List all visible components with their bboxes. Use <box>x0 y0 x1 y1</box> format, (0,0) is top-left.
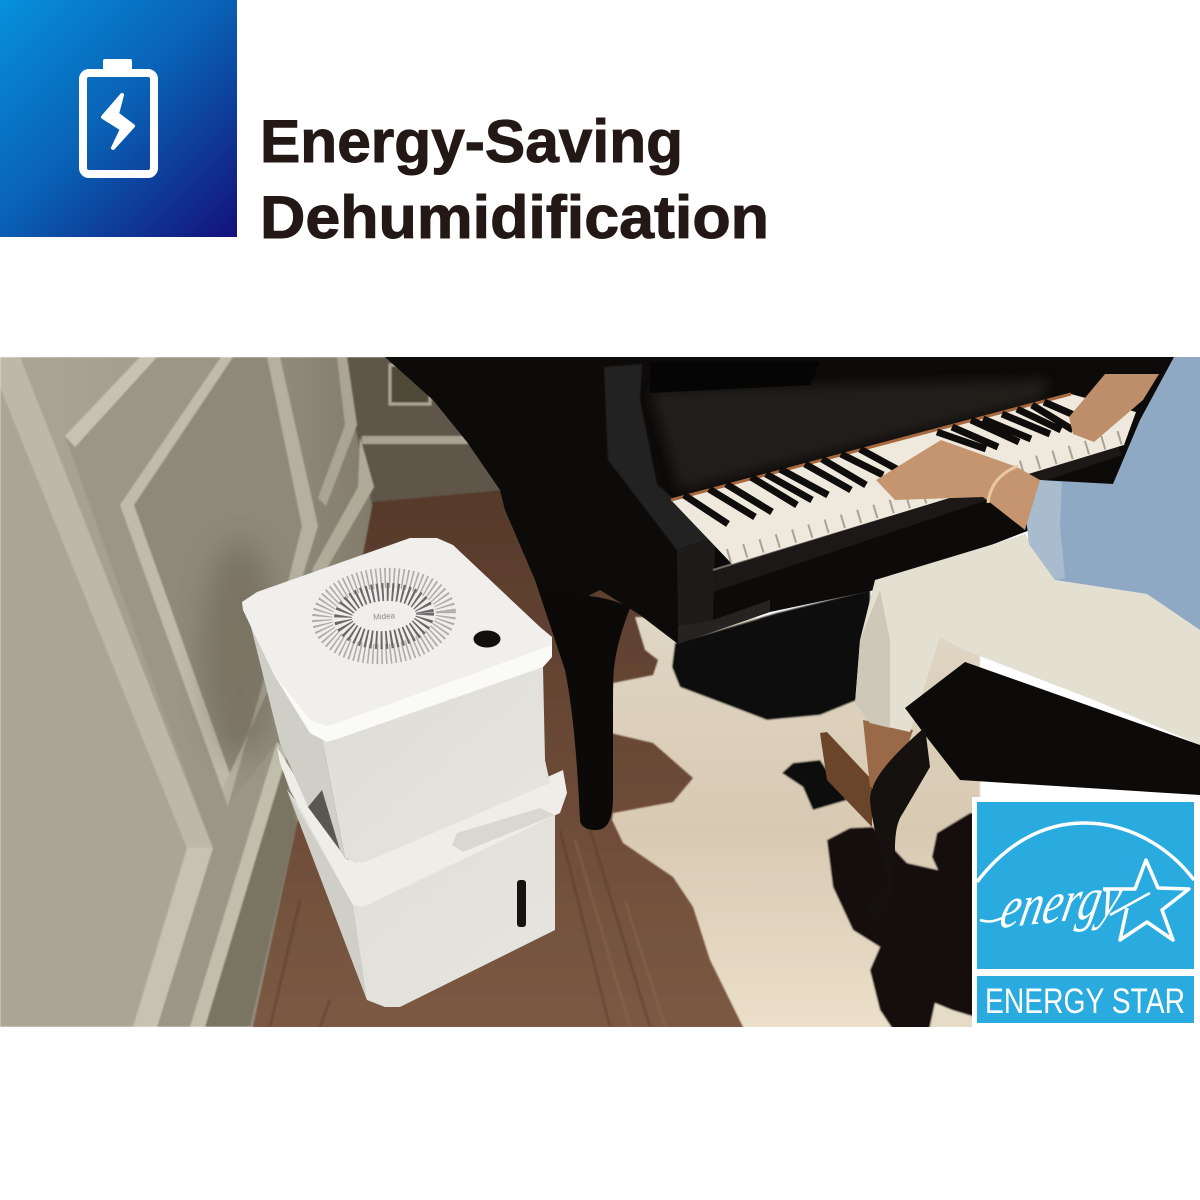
piano keys <box>671 394 1136 564</box>
tank handle <box>452 808 555 852</box>
piano body <box>385 357 1200 644</box>
pianist <box>820 357 1200 827</box>
shirt <box>1025 357 1200 630</box>
bench <box>865 662 1200 917</box>
polished cheek <box>604 364 715 550</box>
wall panelling <box>0 357 520 1027</box>
brand: Midea <box>373 611 396 622</box>
logotype: energy: energy <box>995 862 1129 941</box>
bracelet <box>988 466 1018 503</box>
patch: dark spot under piano <box>672 590 870 720</box>
title: Energy-Saving <box>260 108 683 175</box>
lid <box>242 538 552 742</box>
piano leg <box>535 580 630 830</box>
patch: small spot <box>782 760 847 810</box>
keyblock end <box>677 537 715 626</box>
patch: large spot <box>827 813 980 1040</box>
lower tank <box>287 790 555 1007</box>
fallboard strip <box>713 445 1122 592</box>
cowhide rug <box>610 590 980 1040</box>
icon: arc and star <box>977 823 1194 940</box>
fan grille <box>320 574 448 658</box>
title <box>260 108 769 251</box>
lower leg and shoe <box>820 732 872 827</box>
wood floor <box>250 490 800 1040</box>
wall shadow behind unit <box>202 540 278 760</box>
lid reflections <box>650 380 1050 490</box>
second hand <box>1069 374 1159 442</box>
title: Dehumidification <box>260 184 769 251</box>
water level window <box>517 880 526 927</box>
dehumidifier <box>242 538 567 1007</box>
photo: dehumidifier beside a grand piano <box>0 357 1200 1040</box>
hand on keys <box>876 440 1040 530</box>
trousers <box>855 534 1200 745</box>
upper body <box>322 667 550 863</box>
moulding lines <box>0 357 213 848</box>
tank rim <box>277 747 567 907</box>
control display <box>474 630 500 648</box>
icon: battery with lightning bolt <box>83 59 154 174</box>
icon tile: battery on blue gradient <box>0 0 237 237</box>
patch: cream corner <box>927 1003 975 1040</box>
badge: ENERGY STAR <box>972 797 1197 1027</box>
bench leg <box>865 727 930 917</box>
